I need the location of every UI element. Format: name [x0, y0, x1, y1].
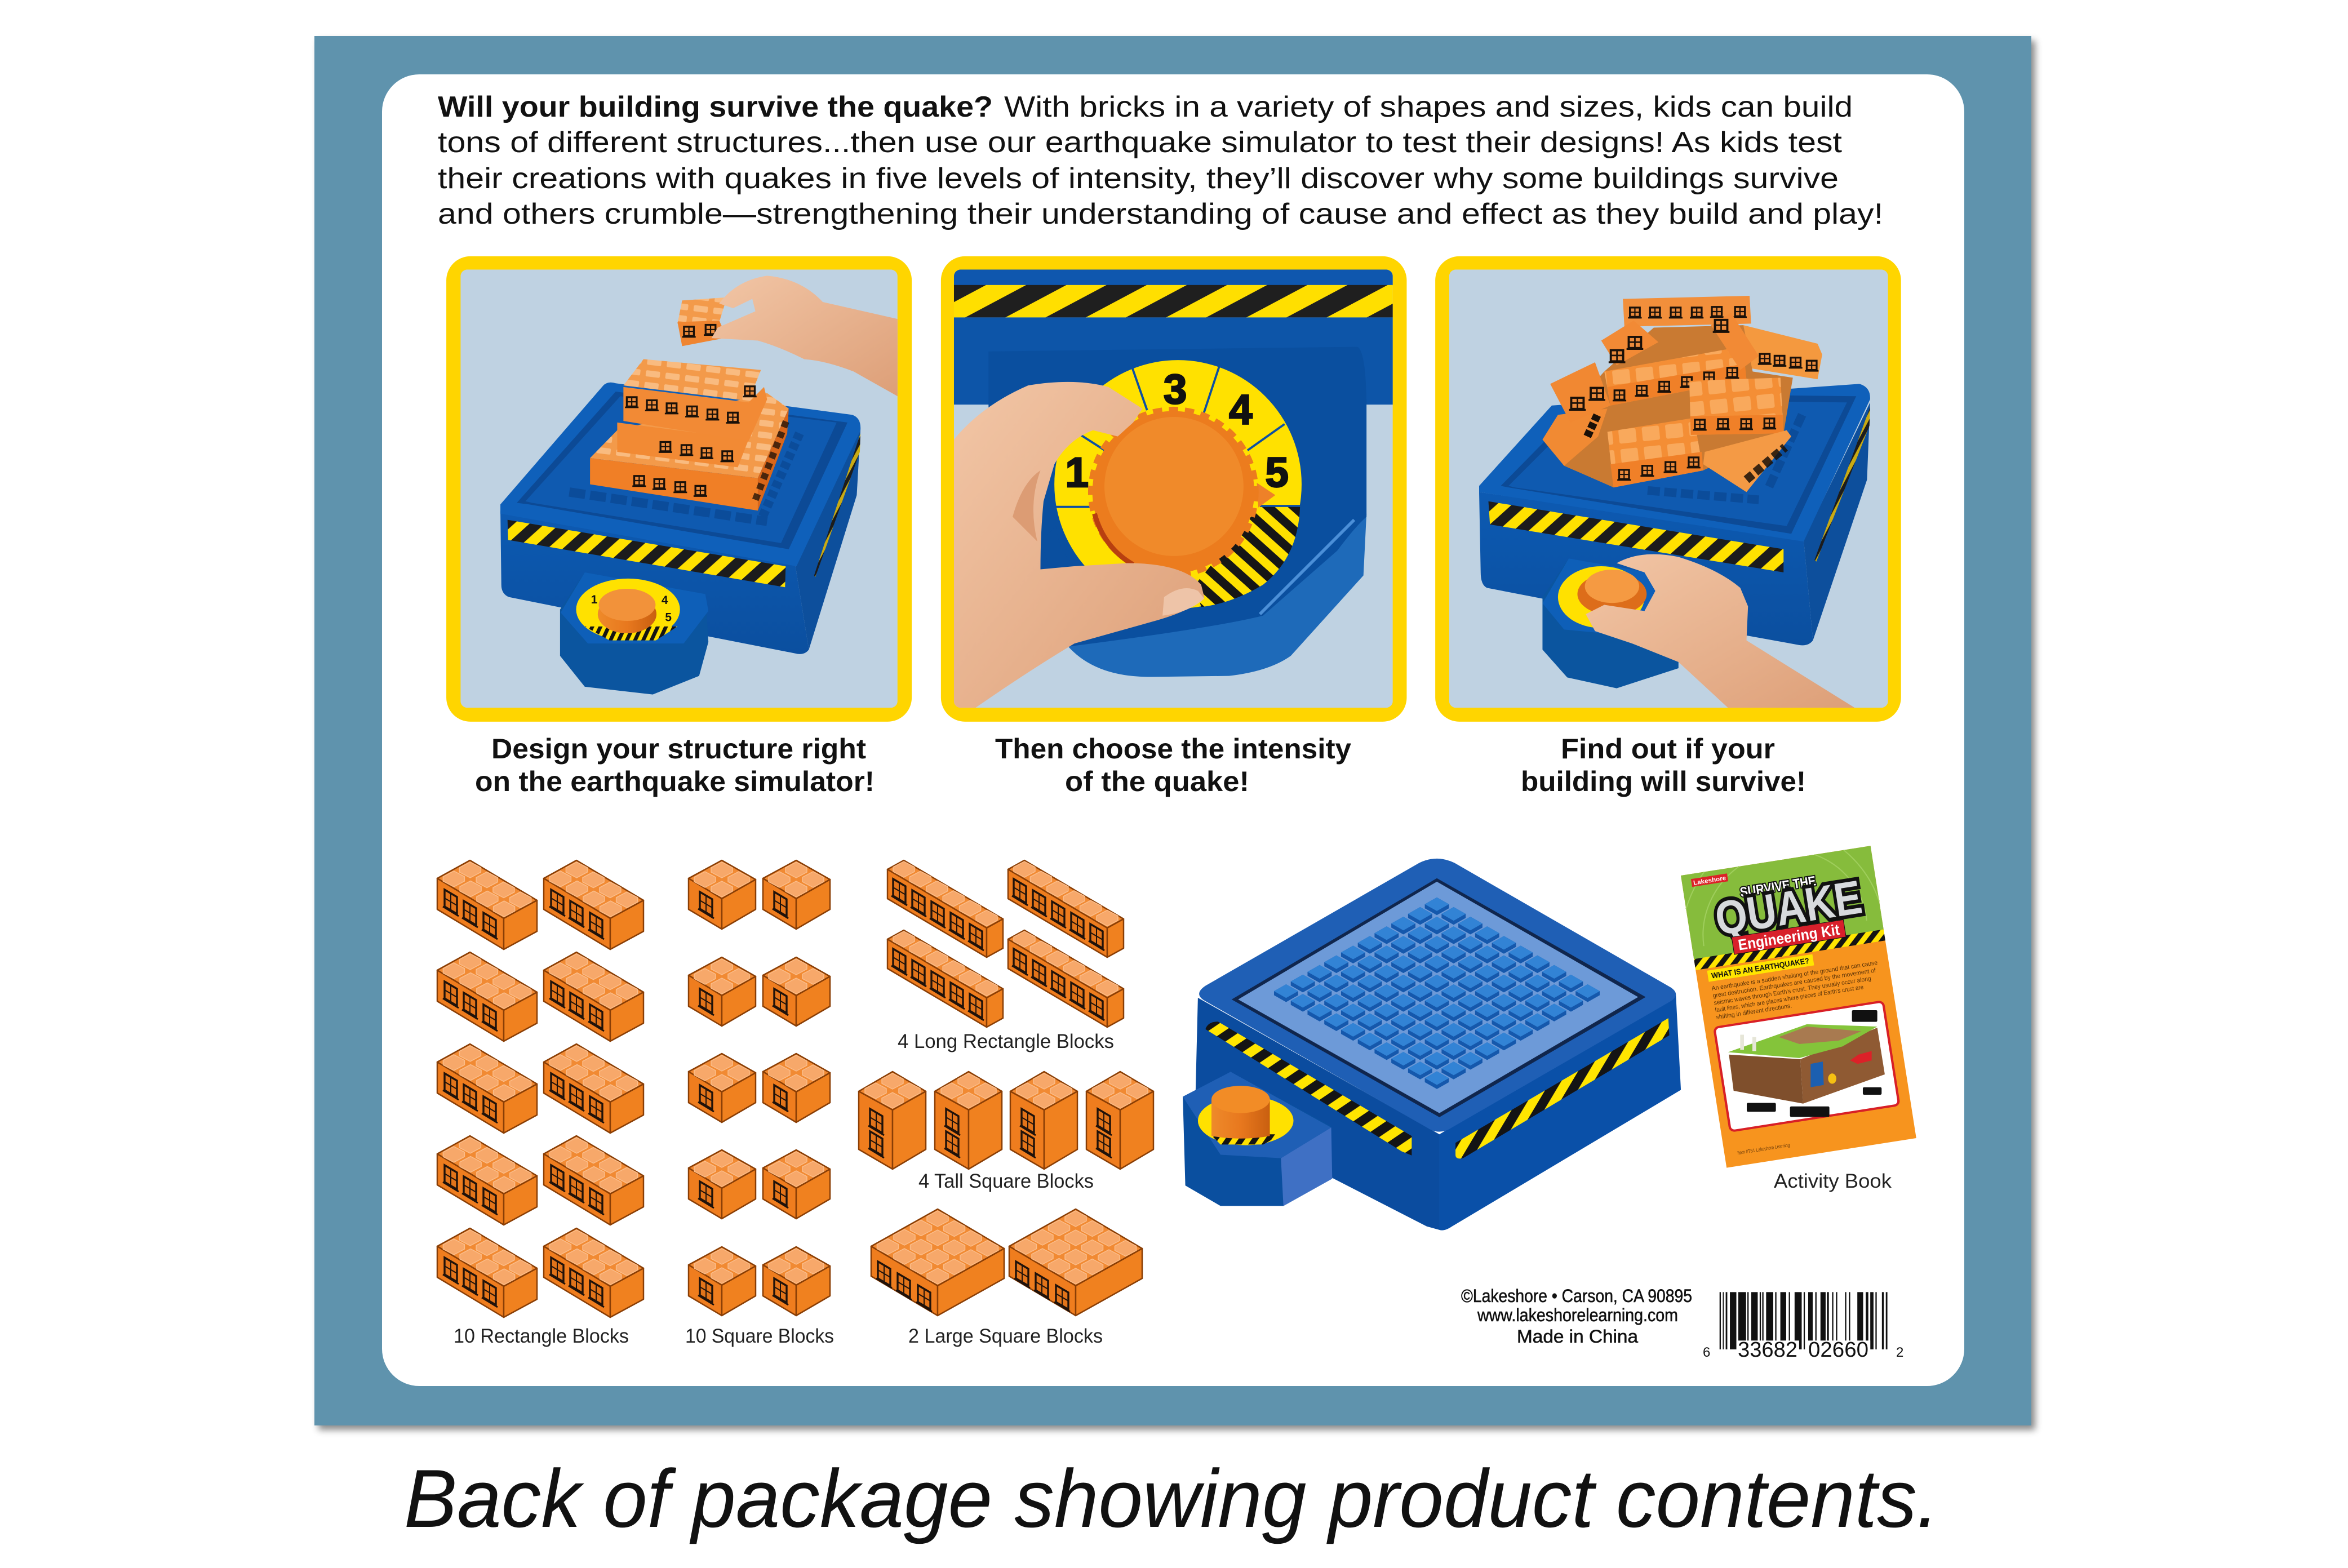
rectangle blocks	[437, 860, 643, 1317]
activity book: Item #TS1 Lakeshore Learning	[1737, 1142, 1790, 1156]
small book paragraph: shifting in different directions.	[1716, 1003, 1792, 1021]
yellow frame	[446, 256, 912, 722]
orange knob	[1090, 409, 1275, 575]
contents labels	[454, 1030, 1892, 1347]
yellow frame	[941, 256, 1406, 722]
contents labels: 10 Square Blocks	[685, 1325, 834, 1347]
yellow dial: 3	[1164, 365, 1187, 412]
intro text block: tons of different structures...then use our earthquake simulator to test their designs! As kids test	[438, 126, 1843, 159]
panel: choose the intensity	[941, 256, 1406, 722]
intro text block	[438, 91, 1883, 230]
photo area	[954, 269, 1393, 708]
activity book: QUAKE	[1712, 870, 1865, 945]
book title: SURVIVE THE	[1739, 874, 1817, 900]
captions under photos: Then choose the intensity	[995, 733, 1351, 765]
white content panel	[382, 74, 1964, 1386]
footer address: ©Lakeshore • Carson, CA 90895	[1461, 1286, 1692, 1306]
simulator base	[500, 383, 860, 654]
intro text block: With bricks in a variety of shapes and sizes, kids can build	[1004, 91, 1853, 123]
stud grid	[1274, 898, 1600, 1089]
yellow dial: 4	[1229, 386, 1253, 433]
activity book: Engineering Kit	[1737, 921, 1841, 953]
hazard strip right	[1455, 1018, 1670, 1158]
small book paragraph: great destruction. Earthquakes are caused by the movement of	[1712, 967, 1877, 1000]
captions under photos	[475, 733, 1806, 797]
photo area	[460, 269, 898, 708]
contents labels: 10 Rectangle Blocks	[454, 1325, 629, 1347]
collapsed brick pile	[1542, 296, 1822, 492]
earthquake simulator illustration	[1183, 859, 1681, 1231]
footer address: Made in China	[1517, 1326, 1638, 1347]
captions under photos: Find out if your	[1561, 733, 1775, 765]
base faces	[1195, 998, 1439, 1230]
intro text block: and others crumble—strengthening their understanding of cause and effect as they build and play!	[438, 198, 1883, 230]
barcode	[1703, 1292, 1903, 1362]
footer address	[1461, 1286, 1692, 1347]
contents labels: 2 Large Square Blocks	[908, 1325, 1103, 1347]
yellow dial	[1040, 360, 1302, 608]
barcode digits: 33682	[1738, 1338, 1797, 1362]
intro text block: Will your building survive the quake?	[438, 91, 993, 123]
green header	[1681, 846, 1884, 960]
captions under photos: building will survive!	[1521, 766, 1806, 797]
small book paragraph	[1711, 960, 1883, 1021]
barcode digits: 2	[1896, 1345, 1903, 1360]
dial	[1198, 1096, 1294, 1145]
diagram card	[1714, 1001, 1899, 1131]
activity book: WHAT IS AN EARTHQUAKE?	[1711, 957, 1810, 981]
knob housing: 5	[665, 611, 672, 624]
hand	[954, 382, 1204, 708]
bottom caption: Back of package showing product contents.	[404, 1452, 1939, 1544]
contents labels: 4 Long Rectangle Blocks	[898, 1030, 1114, 1052]
square blocks	[689, 860, 830, 1316]
what is an earthquake heading	[1707, 954, 1814, 982]
activity book: Lakeshore	[1693, 875, 1726, 887]
contents labels: 4 Tall Square Blocks	[918, 1170, 1094, 1192]
yellow dial: 1	[1065, 448, 1089, 496]
footer address: www.lakeshorelearning.com	[1477, 1305, 1678, 1325]
captions under photos: of the quake!	[1065, 766, 1249, 797]
panel: find out if it survives	[1435, 256, 1901, 722]
knob housing: 1	[591, 593, 597, 606]
intro text block: their creations with quakes in five levels of intensity, they’ll discover why some buildings survive	[438, 162, 1839, 195]
activity book	[1681, 846, 1916, 1168]
hand	[1586, 554, 1854, 708]
simulator base	[1479, 384, 1870, 645]
barcode digits: 02660	[1808, 1338, 1868, 1362]
small book paragraph: An earthquake is a sudden shaking of the ground that can cause	[1711, 960, 1878, 992]
hazard strip left	[1205, 1021, 1412, 1156]
yellow dial: 5	[1265, 448, 1289, 496]
dial housing	[988, 347, 1366, 677]
barcode digits	[1703, 1338, 1903, 1362]
large square blocks	[871, 1209, 1142, 1316]
plate	[1232, 878, 1646, 1117]
hazard strip	[1694, 929, 1885, 970]
small book paragraph: seismic waves through Earth's crust. They usually occur along	[1714, 975, 1871, 1006]
knob	[1211, 1100, 1270, 1139]
knob housing: 4	[662, 594, 668, 607]
orange cover	[1681, 846, 1916, 1168]
captions under photos: on the earthquake simulator!	[475, 766, 875, 797]
captions under photos: Design your structure right	[491, 733, 866, 765]
yellow frame	[1435, 256, 1901, 722]
knob housing	[1183, 1072, 1332, 1206]
tall square blocks	[859, 1072, 1153, 1169]
held brick	[677, 297, 727, 346]
brick pyramid	[590, 359, 789, 510]
contents labels: Activity Book	[1774, 1170, 1892, 1192]
base top	[1199, 859, 1676, 1132]
photo area	[1449, 269, 1888, 708]
knob housing	[1542, 558, 1679, 689]
long rectangle blocks	[887, 860, 1124, 1027]
barcode bars	[1720, 1292, 1888, 1352]
small book paragraph: fault lines, which are places where pieces of Earth's crust are	[1715, 984, 1864, 1014]
teal package background	[314, 36, 2031, 1425]
earth cross-section diagram	[1728, 1010, 1885, 1117]
hand	[712, 276, 898, 396]
logo	[1691, 873, 1728, 887]
panel: design your structure	[446, 256, 912, 722]
barcode digits: 6	[1703, 1345, 1710, 1360]
knob housing	[560, 572, 708, 695]
